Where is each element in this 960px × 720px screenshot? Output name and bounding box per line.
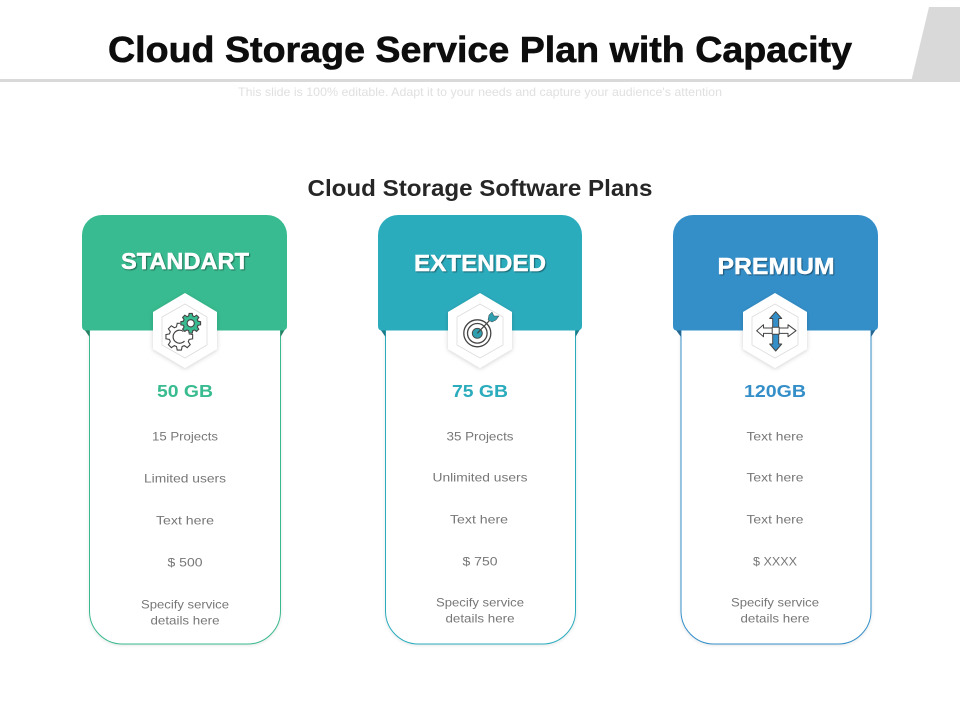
panel: standart plan: [82, 215, 287, 644]
feature list: Specify service: [731, 596, 819, 610]
feature list: 35 Projects: [446, 430, 514, 444]
feature list: Text here: [450, 512, 508, 526]
plan name: STANDART: [121, 248, 249, 274]
plan name: PREMIUM: [718, 253, 834, 279]
card body: [386, 325, 576, 644]
feature list: Specify service: [436, 596, 524, 610]
card body: [681, 325, 871, 644]
hexagon badge: [448, 293, 512, 368]
feature list: details here: [150, 614, 220, 628]
feature list: Text here: [746, 430, 804, 444]
feature list: $ 500: [168, 556, 203, 570]
feature list: [141, 430, 229, 628]
section heading: Cloud Storage Software Plans: [308, 175, 652, 201]
feature list: Unlimited users: [432, 470, 528, 484]
subtitle: This slide is 100% editable. Adapt it to your needs and capture your audience's attention: [238, 85, 722, 99]
icon: gears: [166, 312, 202, 350]
header fold shadows: [378, 326, 582, 337]
capacity: 75 GB: [452, 381, 508, 401]
feature list: $ XXXX: [753, 554, 797, 568]
title: Cloud Storage Service Plan with Capacity: [108, 29, 852, 70]
capacity: 120GB: [744, 381, 806, 401]
capacity: 50 GB: [157, 381, 213, 401]
header rule: [0, 79, 925, 82]
feature list: [731, 430, 819, 626]
feature list: 15 Projects: [152, 430, 218, 444]
corner tab: [911, 7, 960, 82]
icon: target: [464, 312, 499, 347]
hexagon badge: [153, 293, 217, 368]
card header: [82, 215, 287, 330]
feature list: Text here: [156, 514, 214, 528]
card header: [378, 215, 582, 330]
hexagon badge: [743, 293, 807, 368]
header fold shadows: [673, 326, 878, 337]
card body: [90, 325, 280, 644]
feature list: $ 750: [462, 554, 498, 568]
feature list: Text here: [746, 512, 804, 526]
panel: extended plan: [378, 215, 582, 644]
feature list: Text here: [746, 470, 804, 484]
card header: [673, 215, 878, 330]
feature list: details here: [446, 612, 515, 626]
header fold shadows: [82, 326, 287, 337]
feature list: Specify service: [141, 598, 229, 612]
plan name: EXTENDED: [414, 250, 546, 276]
icon: four-way arrows: [757, 312, 796, 351]
feature list: Limited users: [144, 472, 226, 486]
panel: premium plan: [673, 215, 878, 644]
feature list: details here: [740, 612, 810, 626]
feature list: [432, 430, 528, 626]
